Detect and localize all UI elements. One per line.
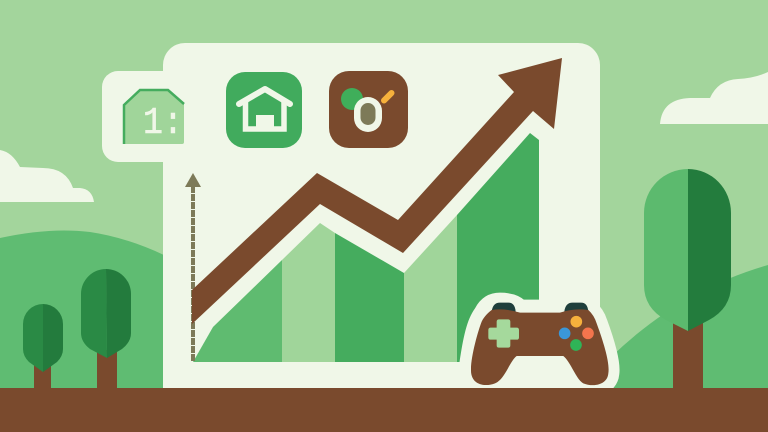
badge icon with number: [124, 90, 184, 145]
badge tab: [102, 71, 170, 162]
right tree: [644, 169, 731, 389]
ground: [0, 388, 768, 432]
rising trend arrow: [192, 58, 562, 324]
main chart panel: [163, 43, 600, 389]
small left tree: [23, 304, 63, 389]
left hill: [0, 230, 170, 388]
right cloud: [660, 72, 768, 124]
right hill: [610, 265, 768, 388]
vertical axis arrow: [185, 173, 201, 361]
game controller: [459, 293, 609, 387]
tall left tree: [81, 269, 131, 389]
game sensor icon: [329, 71, 408, 148]
home icon: [226, 72, 302, 148]
badge number: 1:: [143, 101, 183, 145]
left cloud: [0, 150, 94, 202]
bar chart area: [193, 133, 539, 362]
